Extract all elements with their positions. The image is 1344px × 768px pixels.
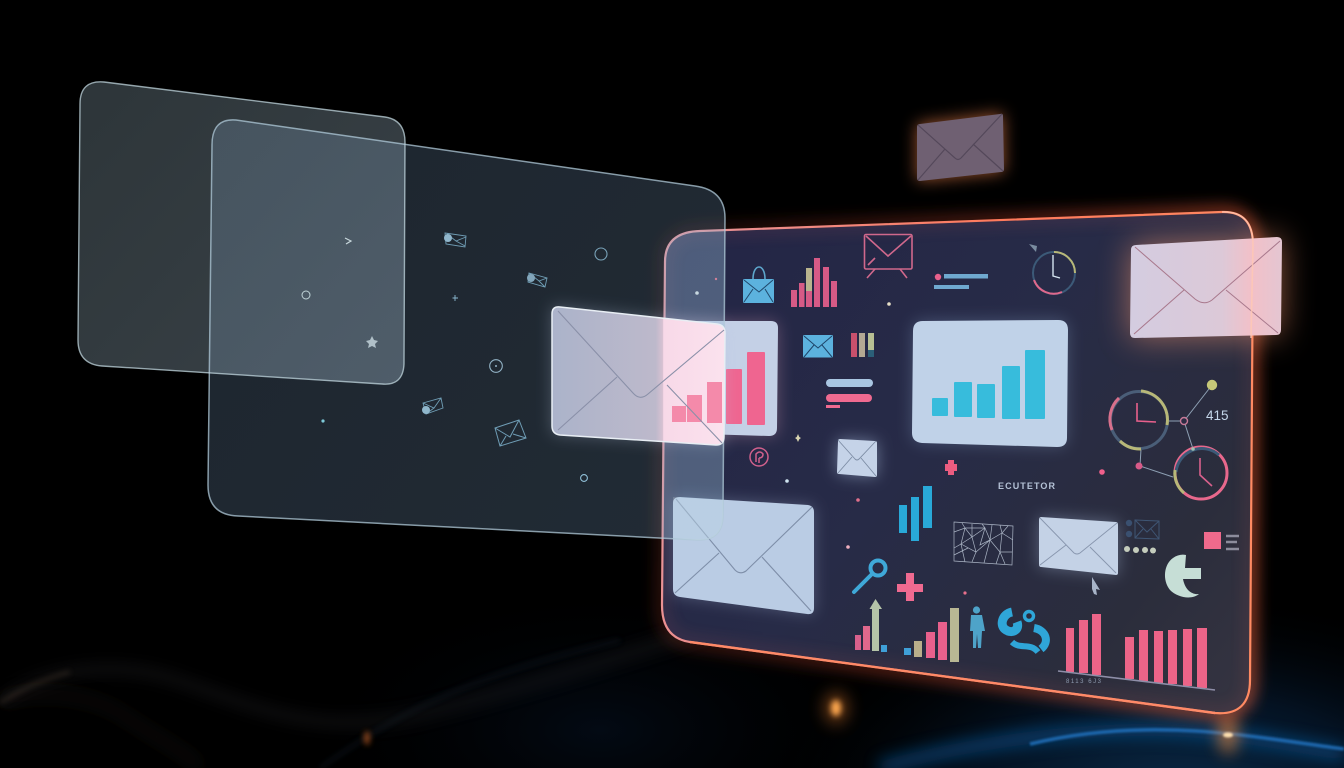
floating envelope: top <box>917 113 1004 181</box>
icon: central envelope with overlapping bars <box>552 306 725 445</box>
chart card: blue bars <box>912 320 1068 447</box>
label: dashboard caption: ECUTETOR <box>998 481 1056 491</box>
icon: blue envelope <box>803 335 833 358</box>
icon: ring 1 <box>595 248 607 260</box>
overlap tint with dashboard <box>663 230 725 540</box>
bar chart: mixed colours <box>904 608 959 662</box>
icon: mesh map <box>954 522 1013 565</box>
panel: rear glass pane <box>78 82 405 384</box>
icon: envelope with dot 3 <box>422 398 443 414</box>
icon: plus sign <box>452 295 458 301</box>
icon: small envelope <box>837 439 877 477</box>
icon: compass ring <box>490 360 502 372</box>
right bottom blue wave <box>880 730 1344 768</box>
icon: blue swirl <box>1002 612 1046 652</box>
icon: cursor <box>1092 577 1100 595</box>
left bottom light waves <box>0 625 720 768</box>
dot <box>321 419 325 423</box>
icon: wire envelope and dots <box>1124 520 1159 554</box>
icon: envelope with dot 2 <box>527 273 547 287</box>
icon: person <box>970 606 985 648</box>
dots in overlap <box>695 278 717 295</box>
icon: medium envelope <box>1039 517 1118 575</box>
icon: ring <box>302 291 310 299</box>
icon: envelope on monitor <box>864 234 912 278</box>
panel: middle glass pane <box>208 120 725 540</box>
panel: foreground analytics dashboard <box>662 212 1253 713</box>
icon: network of clocks <box>1099 380 1227 499</box>
text lines icon <box>826 379 873 408</box>
icon: pink plus <box>897 573 923 601</box>
bar chart: blue rising <box>899 486 932 541</box>
icon: chevron <box>345 238 351 244</box>
orange light flares <box>364 692 1238 754</box>
icon: envelope with lock <box>743 267 774 303</box>
icon: top right envelope <box>1130 212 1282 338</box>
icon: large envelope <box>673 497 814 614</box>
label: chart axis: 8113 6J3 <box>1066 679 1102 685</box>
icon: star <box>366 336 378 348</box>
label: number: 415 <box>1206 408 1229 423</box>
stacked bars <box>851 333 874 357</box>
icon: envelope with dot 1 <box>444 233 466 247</box>
icon: pink marker <box>945 460 957 475</box>
icon: magnifier <box>854 560 886 592</box>
bar chart: small with arrow <box>855 599 887 652</box>
icon: wire envelope <box>495 420 526 446</box>
bar chart: small pink <box>791 258 837 307</box>
icon: circled symbol <box>750 448 768 466</box>
icon: crescent glyph <box>1165 555 1201 597</box>
icon: pink square with lines <box>1204 532 1239 549</box>
overlap tint with large envelope <box>673 497 723 540</box>
highlight: bottom edge <box>690 642 1215 713</box>
bar chart: large pink <box>1058 614 1215 690</box>
icon: small ring <box>581 475 587 481</box>
icon: top clock <box>1029 244 1075 294</box>
legend lines <box>934 274 988 289</box>
sparkle dots <box>785 302 967 595</box>
chart card: pink bars <box>663 321 778 436</box>
